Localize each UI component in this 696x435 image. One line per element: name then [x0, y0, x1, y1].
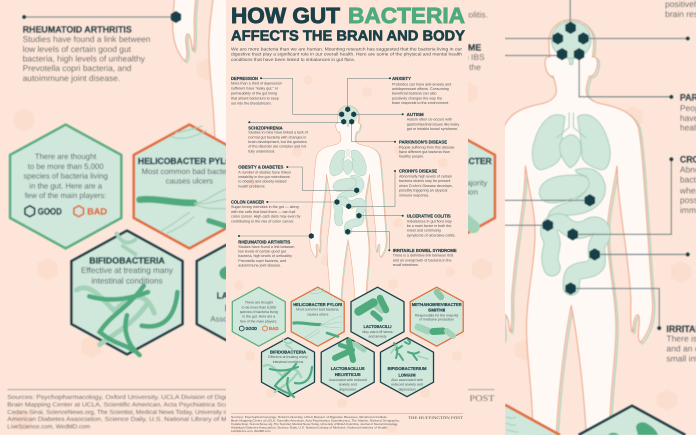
- intro text: digestive tract play a significant role in our overall health. Here are some of the physical and mental health: [231, 52, 463, 57]
- text: anxiety: Probiotics can have anti-anxiety and: [392, 82, 451, 86]
- text: autism: gastrointestinal issues like leaky: [407, 122, 459, 126]
- background: sources: Sources: Psychopharmacology, Oxford University, UCLA Division of Digestive Diseases, Weizmann Institute: [7, 393, 336, 401]
- background: rheumatoid arthritis text: Prevotella copri bacteria, and: [23, 63, 131, 73]
- hexagon text: intro and legend: [240, 301, 278, 331]
- text: irritable bowel syndrome: IRRITABLE BOWEL SYNDROME: [393, 248, 457, 253]
- background: right column fragments: symptoms of ulcerative colitis.: [376, 9, 488, 20]
- text: irritable bowel syndrome: and an overgrowth of bacteria in the: [393, 258, 452, 262]
- text: obesity and diabetes: instability in the gut microbiome: [238, 175, 290, 179]
- text: irritable bowel syndrome: There is a definitive link between IBS: [393, 254, 454, 258]
- text: depression: DEPRESSION: [231, 76, 258, 81]
- text: anxiety: beneficial bacteria can also: [392, 92, 436, 96]
- background: hexagon text: Associated with reduced: [210, 315, 294, 324]
- text: parkinson's disease: People suffering from this disease: [399, 145, 454, 149]
- text: obesity and diabetes: health problems.: [238, 184, 266, 188]
- human body figure with organs: [310, 106, 387, 301]
- text: autism: Autism often co-occurs with: [407, 118, 452, 122]
- text: schizophrenia: brain development, but the genetics: [248, 140, 307, 144]
- background: rheumatoid arthritis text: Studies have found a link between: [23, 34, 151, 44]
- background: hexagon text: Effective at treating many: [81, 265, 173, 275]
- hexagon text: bifidobacteria: intestinal conditions: [273, 360, 304, 364]
- text: depression: [231, 76, 282, 105]
- background: hexagon text: BIFIDOBACTERIA: [89, 255, 165, 266]
- text: crohn's disease: Abnormally high levels of certain: [399, 174, 452, 178]
- text: rheumatoid arthritis: Studies have found a link between: [238, 245, 294, 249]
- background: right column fragments: small intestines.: [347, 72, 407, 82]
- background: right column fragments: [468, 10, 488, 71]
- hexagon text: lactobacillus helveticus: anxiety and: [339, 383, 357, 387]
- background: hexagon text: Also associated with: [342, 315, 412, 324]
- title: AFFECTS THE BRAIN AND BODY: [231, 29, 465, 45]
- text: anxiety: brain responds to the environment.: [392, 101, 449, 105]
- background: hexagon text: HELICOBACTER PYLORI: [138, 156, 241, 166]
- background: hexagon text: BIFIDOBACTERIUM: [336, 290, 419, 300]
- text: ulcerative colitis: [407, 214, 456, 237]
- background: hexagon text: Responsible for the majority: [391, 179, 488, 188]
- background: right column fragments: There is a definitive link between IBS: [347, 52, 485, 62]
- text: irritable bowel syndrome: small intestines.: [393, 263, 419, 267]
- text: depression: permeability of the gut lining: [231, 91, 277, 95]
- hexagon: lactobacillus helveticus: [321, 338, 374, 397]
- text: anxiety: [392, 76, 451, 105]
- background: hexagon text: There are thought: [35, 153, 96, 161]
- background: hexagon text: HELVETICUS: [225, 303, 280, 313]
- hexagon text: bifidobacterium longum: depression: [398, 387, 416, 391]
- text: parkinson's disease: PARKINSON'S DISEASE: [399, 140, 447, 144]
- background: right column fragments: IRRITABLE BOWEL SYNDROME: [347, 42, 481, 53]
- background: hexagon text: few of the main players:: [25, 192, 107, 200]
- hexagon: bifidobacterium longum: [380, 338, 434, 397]
- background: rheumatoid arthritis text: [23, 24, 151, 83]
- text: autism: gut or irritable bowel syndrome.: [407, 127, 458, 131]
- text: schizophrenia: fully understood.: [248, 149, 275, 153]
- background: rheumatoid arthritis text: RHEUMATOID ARTHRITIS: [23, 24, 132, 34]
- sources footer: Cedars-Sinai, ScienceNews.org, The Scientist, Medical News Today, University of British Columbia, Journal of Neuroimmunology,: [231, 422, 398, 426]
- text: colon cancer: with the cells that feed them — can fuel: [231, 210, 296, 214]
- text: crohn's disease: when Crohn's Disease develops,: [399, 184, 453, 188]
- intro text: We are more bacteria than we are human. Mounting research has suggested that the bacteria living in our: [231, 46, 463, 52]
- text: depression: out into the bloodstream.: [231, 101, 272, 105]
- hexagon: bifidobacteria: [262, 338, 314, 397]
- hexagon text: lactobacilli: [362, 324, 393, 339]
- hexagon: intro: [232, 287, 285, 346]
- text: obesity and diabetes: [238, 165, 291, 188]
- text: rheumatoid arthritis: RHEUMATOID ARTHRITIS: [238, 239, 290, 244]
- background: sources: Brain Mapping Center at UCLA, Scientific American, Acta Psychiatrica Scandinavica, The Atlantic, National Geographic,: [7, 400, 363, 409]
- text: ulcerative colitis: be a main factor in both the: [407, 224, 451, 228]
- intro text: conditions that have been linked to imbalances in gut flora.: [231, 57, 355, 62]
- text: parkinson's disease: have different gut bacteria than: [399, 150, 450, 154]
- background: hexagon text: Most common bad bacteria,: [142, 168, 237, 176]
- hexagon: helicobacter pylori: [291, 287, 344, 346]
- background: hexagon text: LACTOBACILLUS: [217, 290, 288, 300]
- text: rheumatoid arthritis: bacteria, high levels of unhealthy: [238, 254, 292, 258]
- text: crohn's disease: CROHN'S DISEASE: [399, 169, 437, 174]
- hexagon: lactobacilli: [351, 287, 404, 346]
- hexagon text: bifidobacterium longum: BIFIDOBACTERIUM: [388, 366, 427, 371]
- background: enlarged left copy of the infographic: [0, 0, 505, 435]
- hexagon text: helicobacter pylori: Most common bad bacteria,: [296, 308, 339, 312]
- hexagon text: helicobacter pylori: HELICOBACTER PYLORI: [293, 302, 342, 307]
- text: rheumatoid arthritis: Prevotella copri bacteria, and: [238, 259, 286, 263]
- connector lines and markers: [238, 77, 404, 251]
- text: anxiety: positively changes the way the: [392, 96, 442, 100]
- text: schizophrenia: [248, 125, 309, 153]
- background: rheumatoid arthritis text: bacteria, high levels of unhealthy: [23, 53, 145, 64]
- hexagon text: intro and legend: species of bacteria living: [240, 310, 278, 314]
- background: hexagon text: in the gut. Here are a: [29, 182, 104, 190]
- text: obesity and diabetes: A number of studies have linked: [238, 170, 291, 174]
- hexagon text: bifidobacterium longum: LONGUM: [398, 373, 416, 378]
- hexagon text: bifidobacterium longum: reduced anxiety and: [391, 383, 423, 387]
- hexagon text: methanobrevibacter smithii: [412, 302, 462, 322]
- text: colon cancer: contributing to the rise of colon cancer.: [231, 219, 294, 223]
- text: crohn's disease: bacteria strains may be present: [399, 179, 450, 183]
- background: hexagon text: LONGUM: [359, 304, 396, 314]
- text: obesity and diabetes: OBESITY & DIABETES: [238, 165, 283, 170]
- text: rheumatoid arthritis: [238, 239, 294, 267]
- background: hexagon text: of methane production: [401, 188, 478, 197]
- background: sources: LiveScience.com, WedMD.com: [7, 422, 91, 431]
- hexagon text: lactobacillus helveticus: Associated with reduced: [329, 378, 367, 382]
- background: enlarged right copy of the infographic: [505, 0, 696, 435]
- text: schizophrenia: SCHIZOPHRENIA: [248, 125, 283, 130]
- intro text: [231, 46, 463, 62]
- text: anxiety: antidepressant effects. Consuming: [392, 87, 449, 91]
- text: schizophrenia: of the disorder are complex and not: [248, 145, 306, 149]
- panel: central infographic: [226, 0, 468, 435]
- title: [231, 7, 466, 41]
- background: hexagon text: METHANOBREVIBACTER: [387, 156, 492, 166]
- background: sources: [7, 390, 496, 431]
- text: depression: that allows bacterium to seep: [231, 97, 279, 101]
- text: ulcerative colitis: symptoms of ulcerative colitis.: [407, 233, 456, 237]
- background: right column fragments: and an overgrowth of bacteria in the: [347, 62, 483, 72]
- text: autism: [407, 112, 459, 131]
- hexagon text: bifidobacteria: Effective at treating many: [268, 355, 308, 359]
- background: right copy text fragments: [665, 0, 696, 364]
- hexagon text: lactobacilli: LACTOBACILLI: [364, 324, 392, 329]
- text: rheumatoid arthritis: low levels of certain good gut: [238, 250, 286, 254]
- text: parkinson's disease: healthy people.: [399, 155, 424, 159]
- text: rheumatoid arthritis: autoimmune joint disease.: [238, 263, 281, 267]
- hexagon: methanobrevibacter smithii: [410, 287, 463, 346]
- hexagon text: intro and legend: There are thought: [245, 301, 273, 305]
- hexagon text: intro and legend: GOOD: [246, 326, 257, 331]
- sources footer: LiveScience.com, WedMD.com: [231, 429, 271, 433]
- hexagon text: intro and legend: few of the main players:: [240, 319, 277, 323]
- background: tops of the enlarged hexagons: [505, 405, 686, 435]
- credit: the huffington post: THE HUFFINGTON POST: [408, 415, 464, 420]
- hexagon text: bifidobacterium longum: Also associated with: [391, 378, 423, 382]
- background: hexagon text: depression: [233, 335, 271, 343]
- text: crohn's disease: immune response.: [399, 193, 429, 197]
- sources footer: [231, 413, 463, 433]
- text: crohn's disease: [399, 169, 453, 197]
- text: colon cancer: [231, 200, 301, 223]
- background: hexagon text: May ward off stress: [281, 214, 349, 223]
- title: HOW GUT: [231, 3, 341, 28]
- background: hexagon text: SMITHII: [421, 167, 457, 178]
- background: hexagon text: BAD: [87, 206, 107, 216]
- background: rheumatoid arthritis text: low levels of certain good gut: [23, 43, 133, 54]
- background: hexagon text: anxiety and: [233, 325, 272, 333]
- background: hexagon text: causes ulcers: [166, 177, 213, 186]
- background: hexagon text: species of bacteria living: [23, 172, 108, 181]
- background: sources: American Diabetes Association, Science Daily, U.S. National Library of Medicine, National Institutes of Health,: [7, 415, 337, 423]
- text: colon cancer: colon cancer. High-carb diets may even by: [231, 215, 301, 219]
- hexagon text: lactobacillus helveticus: [329, 366, 367, 391]
- background: hexagon text: LACTOBACILLI: [286, 202, 344, 212]
- background: hexagon text: [23, 153, 492, 322]
- background: sources: Cedars-Sinai, ScienceNews.org, The Scientist, Medical News Today, University of British Columbia, Journal of Neuroimmunology,: [7, 408, 358, 416]
- background: hexagon text: depression: [358, 335, 396, 343]
- hexagon text: intro and legend: BAD: [269, 326, 278, 331]
- text: depression: sufferers have "leaky gut," or: [231, 87, 279, 91]
- background: rheumatoid arthritis text: autoimmune joint disease.: [23, 72, 120, 83]
- text: ulcerative colitis: Imbalances in gut flora may: [407, 219, 452, 223]
- text: crohn's disease: possibly triggering an atypical: [399, 189, 448, 193]
- hexagon text: helicobacter pylori: causes ulcers: [307, 312, 329, 316]
- hexagon text: intro and legend: to be more than 5,000: [242, 305, 276, 309]
- sources footer: Brain Mapping Center at UCLA, Scientific American, Acta Psychiatrica Scandinavica, The Atlantic, National Geographic,: [231, 418, 400, 422]
- hexagon text: bifidobacteria: [268, 350, 308, 363]
- hexagon text: bifidobacteria: BIFIDOBACTERIA: [270, 349, 306, 354]
- background: hexagon text: GOOD: [38, 206, 62, 216]
- text: anxiety: ANXIETY: [392, 76, 411, 81]
- hexagon text: intro and legend: in the gut. Here are a: [242, 315, 275, 319]
- hexagon text: lactobacillus helveticus: HELVETICUS: [335, 372, 361, 377]
- hexagon text: methanobrevibacter smithii: of methane production: [419, 318, 454, 322]
- background: hexagon text: and anxiety: [295, 224, 335, 232]
- background: hexagon text: intestinal conditions: [91, 275, 163, 286]
- text: schizophrenia: normal gut bacteria with changes in: [248, 135, 306, 139]
- bacteria hexagons: [232, 287, 463, 397]
- hexagon text: bifidobacterium longum: [388, 366, 427, 391]
- text: ulcerative colitis: ULCERATIVE COLITIS: [407, 214, 451, 219]
- hexagon text: methanobrevibacter smithii: SMITHII: [428, 308, 445, 313]
- background: sources: THE HUFFINGTON POST: [379, 392, 496, 403]
- text: depression: More than a third of depression: [231, 82, 282, 86]
- title: BACTERIA: [348, 3, 465, 28]
- text: parkinson's disease: [399, 140, 454, 159]
- hexagon text: lactobacillus helveticus: depression: [339, 387, 356, 391]
- text: ulcerative colitis: onset and continuing: [407, 229, 441, 233]
- sources footer: Sources: Psychopharmacology, Oxford University, UCLA Division of Digestive Diseases, Weizmann Institute: [231, 415, 387, 419]
- hexagon text: lactobacillus helveticus: LACTOBACILLUS: [331, 366, 365, 371]
- hexagon text: helicobacter pylori: [293, 303, 342, 316]
- text: autism: AUTISM: [407, 112, 424, 117]
- text: colon cancer: Sugar-loving microbes in the gut — along: [231, 205, 299, 209]
- text: irritable bowel syndrome: [393, 248, 457, 267]
- hexagon text: lactobacilli: May ward off stress: [362, 330, 393, 334]
- sources footer: American Diabetes Association, Science Daily, U.S. National Library of Medicine, National Institutes of Health,: [231, 425, 388, 429]
- text: schizophrenia: Studies in mice have linked a lack of: [248, 131, 309, 135]
- background: hexagon text: to be more than 5,000: [28, 163, 104, 171]
- text: obesity and diabetes: to obesity and obesity-related: [238, 180, 286, 184]
- background: hexagon text: reduced anxiety and: [342, 325, 412, 333]
- hexagon text: methanobrevibacter smithii: Responsible for the majority: [415, 313, 459, 317]
- hexagon text: methanobrevibacter smithii: METHANOBREVIBACTER: [412, 302, 462, 307]
- text: colon cancer: COLON CANCER: [231, 200, 265, 205]
- hexagon text: lactobacilli: and anxiety: [369, 335, 387, 339]
